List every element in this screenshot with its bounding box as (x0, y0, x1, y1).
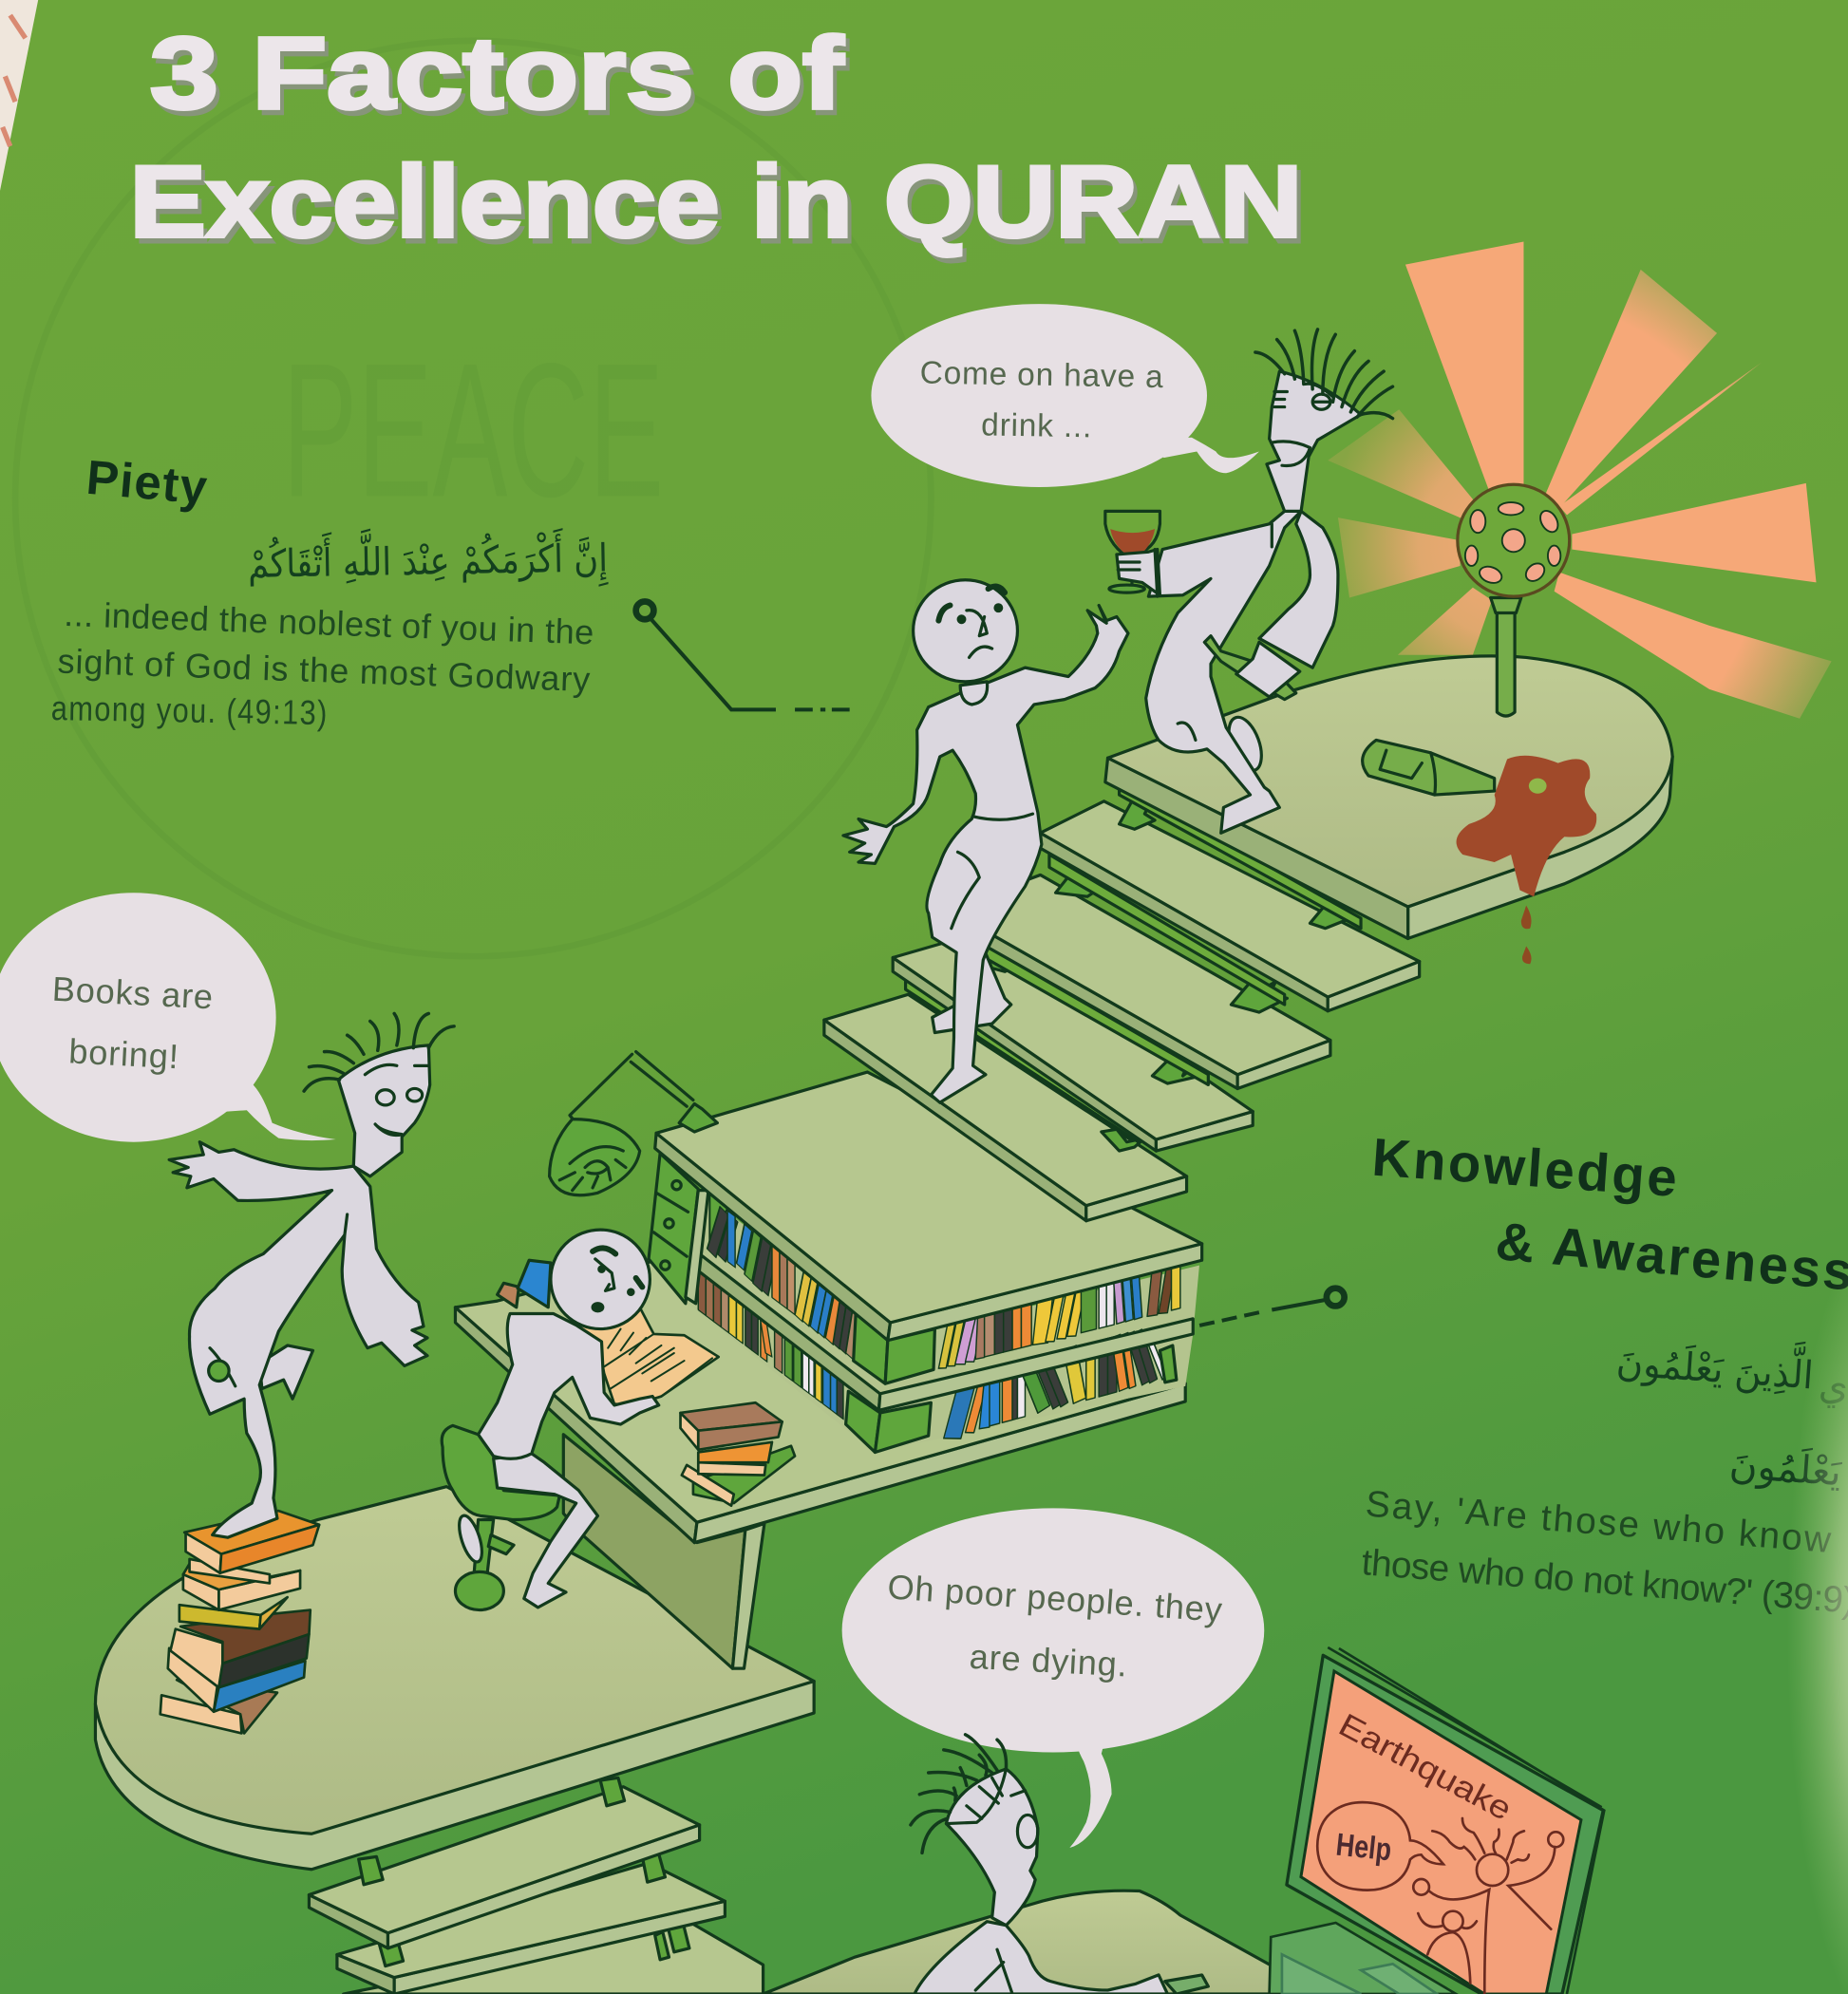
bubble: dying: Oh poor people. they (886, 1567, 1224, 1629)
bubble: drink: drink ... (981, 407, 1093, 444)
bottom platform (95, 1487, 814, 1870)
title: Excellence in QURAN (130, 144, 1302, 258)
boy on stairs (843, 580, 1128, 1102)
bubble: books are boring: Books are (51, 969, 215, 1016)
sun rays (1328, 241, 1832, 719)
bubble: drink: Come on have a (919, 356, 1164, 395)
student at desk (442, 1230, 659, 1610)
arabic verse: piety: إِنَّ أَكْرَمَكُمْ عِنْدَ اللَّهِ أَتْقَاكُمْ (247, 524, 609, 593)
title (130, 16, 1306, 263)
books: right face lower row (944, 1321, 1167, 1443)
bubble: dying: are dying. (969, 1637, 1129, 1684)
arabic verse: knowledge (1615, 1327, 1848, 1495)
connector: piety (636, 601, 852, 709)
translation: knowledge: Say, 'Are those who know (1364, 1484, 1834, 1561)
books: right face upper row (938, 1251, 1180, 1371)
lower steps (309, 1778, 764, 1994)
heading: knowledge: Knowledge (1370, 1127, 1682, 1208)
paper corner (0, 0, 38, 191)
desk (455, 1259, 1185, 1668)
connector: knowledge (1196, 1289, 1345, 1326)
heading: awareness: & Awareness (1494, 1211, 1848, 1302)
title: 3 Factors of (154, 21, 847, 135)
watermark (15, 41, 931, 956)
arabic verse: knowledge: الَّذِينَ يَعْلَمُونَ (1615, 1327, 1816, 1398)
lamp with orange dots (1458, 484, 1570, 716)
bubble: drink (871, 304, 1259, 487)
translation: piety: among you. (49:13) (50, 688, 329, 732)
translation: piety (50, 594, 596, 732)
third platform (764, 1891, 1323, 1994)
tv showing earthquake: Earthquake (1333, 1706, 1518, 1828)
translation: knowledge (1360, 1484, 1848, 1622)
books: left face upper row (707, 1195, 860, 1365)
tv showing earthquake: Help (1334, 1827, 1393, 1868)
stairs: upper (824, 782, 1420, 1221)
text block: piety (50, 450, 609, 732)
man: books are boring (169, 1013, 454, 1537)
translation: piety: sight of God is the most Godwary (57, 642, 593, 699)
bookshelf (649, 1072, 1202, 1452)
spilled wine and bottle (1363, 740, 1596, 964)
title: 3 Factors of (150, 16, 843, 130)
title: Excellence in QURAN (134, 149, 1306, 263)
top platform (1105, 656, 1672, 938)
tv showing earthquake (1270, 1647, 1604, 1994)
bubble: books are boring: boring! (67, 1031, 180, 1076)
watermark: PEACE (282, 323, 664, 536)
man: bottom (911, 1735, 1208, 1994)
books: left face lower row (698, 1262, 843, 1420)
heading: piety: Piety (85, 450, 211, 515)
book stack under man (160, 1511, 319, 1733)
translation: knowledge: those who do not know?' (39:9) (1360, 1542, 1848, 1622)
page edge glow (1787, 1208, 1848, 1994)
desk lamp (550, 1052, 717, 1195)
open book (570, 1307, 719, 1405)
text block: knowledge and awareness (1360, 1127, 1848, 1622)
bubble: dying (842, 1508, 1264, 1848)
translation: piety: ... indeed the noblest of you in the (64, 594, 596, 651)
book stack on desk (681, 1402, 795, 1506)
man: offering drink (1105, 329, 1393, 833)
arabic verse: knowledge: ي (1819, 1364, 1848, 1408)
arabic verse: knowledge: يَعْلَمُونَ (1728, 1441, 1843, 1495)
bubble: books are boring (0, 893, 336, 1142)
